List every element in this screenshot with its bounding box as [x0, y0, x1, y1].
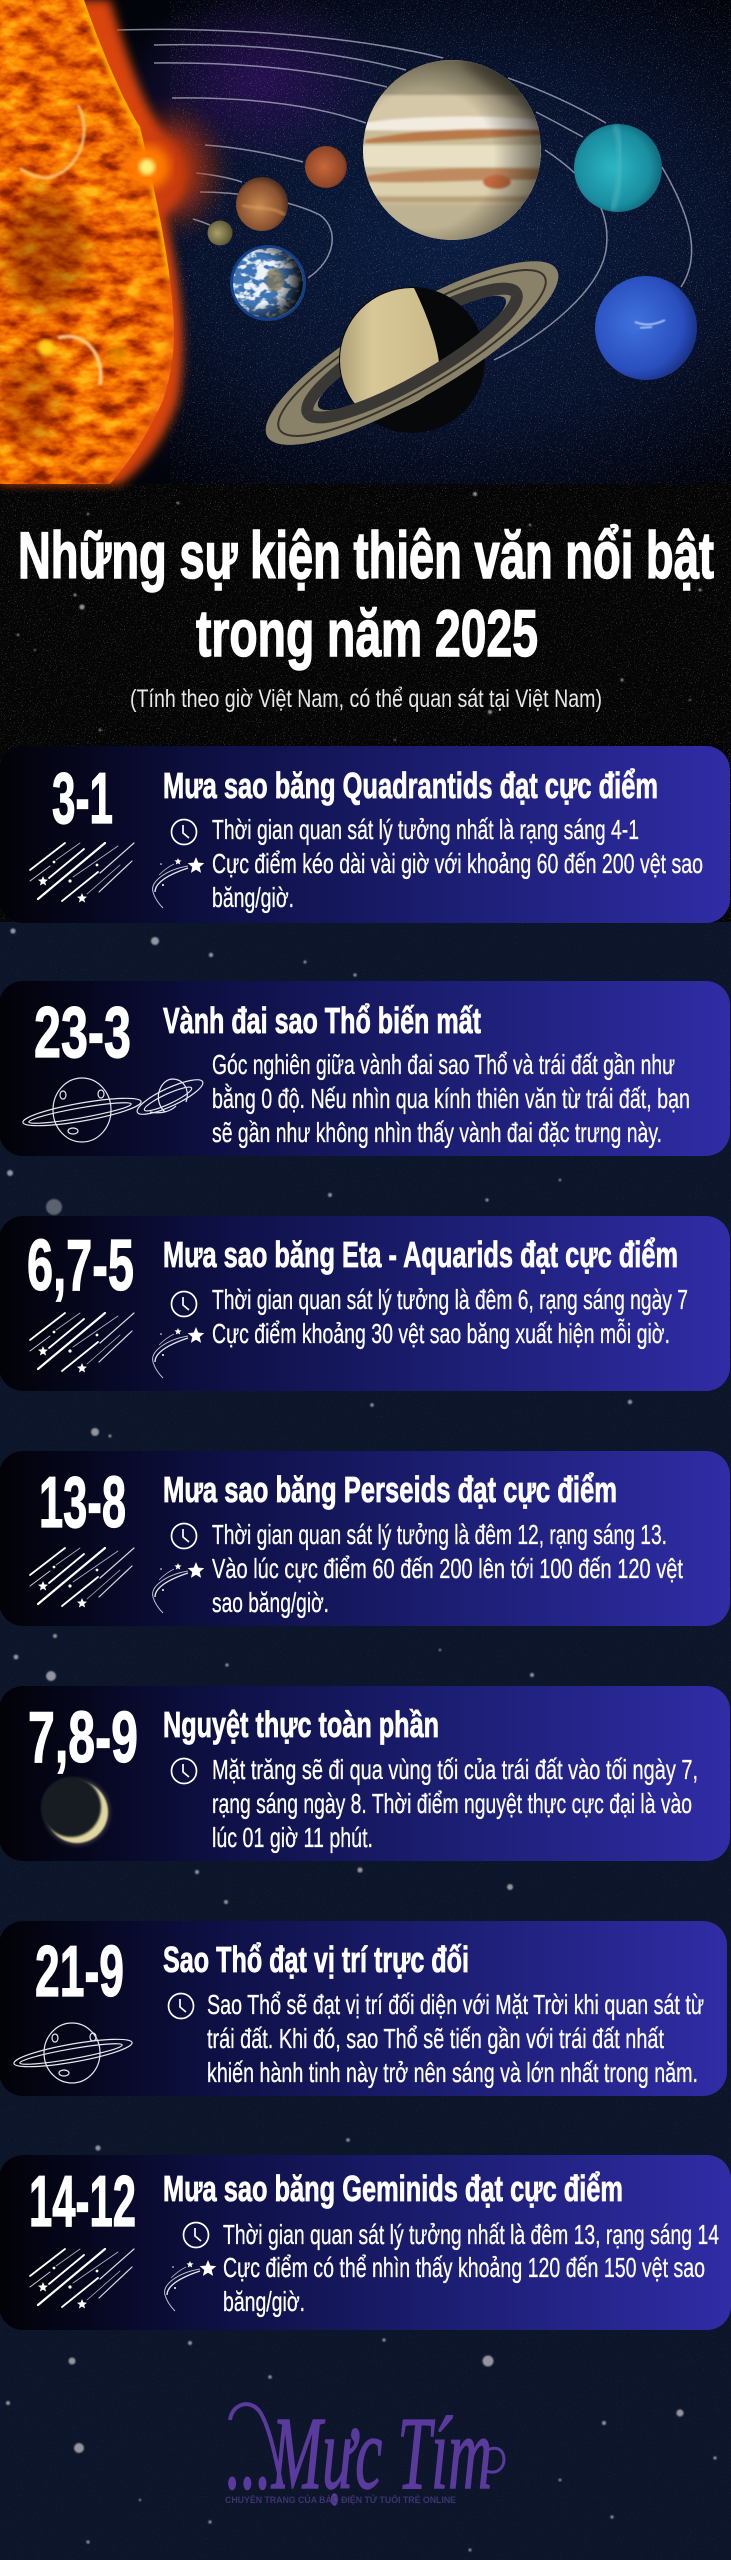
icon: clock — [172, 820, 196, 844]
date: 14-12 — [29, 2162, 136, 2242]
panel: event 23-3 — [0, 981, 730, 1156]
icon: ringed planet — [12, 2023, 134, 2083]
icon: meteors — [30, 843, 134, 902]
panel: event 13-8 — [0, 1451, 730, 1626]
body text — [212, 1049, 690, 1148]
icon: shooting star — [153, 1562, 204, 1613]
panel: event 7,8-9 — [0, 1686, 730, 1861]
panel: event 3-1 — [0, 746, 730, 923]
page background: dark starry lower section — [0, 920, 731, 2560]
body text: lúc 01 giờ 11 phút. — [212, 1822, 373, 1853]
body text: băng/giờ. — [223, 2286, 305, 2317]
Mercury — [208, 220, 232, 246]
sun — [0, 0, 208, 484]
date: 7,8-9 — [28, 1698, 138, 1778]
Uranus — [574, 124, 662, 212]
body text — [207, 1989, 704, 2088]
hero illustration: solar system — [0, 0, 731, 484]
panel: event 14-12 — [0, 2155, 731, 2330]
icon: meteors — [30, 1313, 134, 1372]
icon: meteors — [30, 2249, 134, 2308]
icon: eclipsed moon — [41, 1777, 110, 1845]
panel: event 6,7-5 — [0, 1216, 730, 1391]
Jupiter — [360, 60, 550, 245]
icon: clock — [172, 1292, 196, 1316]
icon: clock — [172, 1758, 196, 1784]
panel: event 21-9 — [0, 1921, 727, 2096]
orbit lines — [117, 29, 692, 360]
date: 3-1 — [52, 759, 113, 839]
background stars — [6, 492, 717, 2552]
Saturn — [266, 261, 558, 445]
icon: clock — [184, 2222, 208, 2248]
icon: two ringed planets — [21, 1074, 206, 1142]
body text — [223, 2219, 719, 2317]
icon: meteors — [30, 1548, 134, 1608]
logo caption: CHUYÊN TRANG CỦA BÁO ĐIỆN TỬ TUỔI TRẺ ONLINE — [225, 2494, 456, 2505]
Neptune — [595, 276, 697, 380]
Earth — [230, 245, 306, 321]
body text — [212, 1519, 683, 1618]
Venus — [236, 177, 288, 231]
page background: black speckled title section — [0, 484, 731, 922]
icon: shooting star — [153, 1327, 204, 1378]
icon: shooting star — [153, 857, 204, 908]
body text — [212, 1754, 698, 1853]
heading: Sao Thổ đạt vị trí trực đối — [163, 1939, 469, 1980]
Mars — [305, 146, 347, 188]
date: 6,7-5 — [27, 1226, 134, 1306]
title: trong năm 2025 — [196, 596, 538, 670]
title — [18, 518, 714, 670]
icon: clock — [172, 1524, 196, 1548]
body text: sao băng/giờ. — [212, 1587, 329, 1618]
date: 13-8 — [39, 1463, 126, 1543]
body text — [212, 814, 703, 913]
icon: clock — [168, 1994, 194, 2018]
logo: Mực Tím — [225, 2396, 504, 2511]
icon: shooting star — [165, 2260, 216, 2311]
logo: Mực Tím: ...Mực Tím — [226, 2396, 492, 2511]
date: 23-3 — [34, 993, 131, 1073]
heading: Vành đai sao Thổ biến mất — [163, 1000, 481, 1041]
date: 21-9 — [35, 1932, 124, 2012]
body text: băng/giờ. — [212, 882, 294, 913]
heading: Nguyệt thực toàn phần — [163, 1704, 439, 1745]
subtitle: (Tính theo giờ Việt Nam, có thể quan sát tại Việt Nam) — [130, 685, 602, 713]
body text — [212, 1284, 688, 1349]
